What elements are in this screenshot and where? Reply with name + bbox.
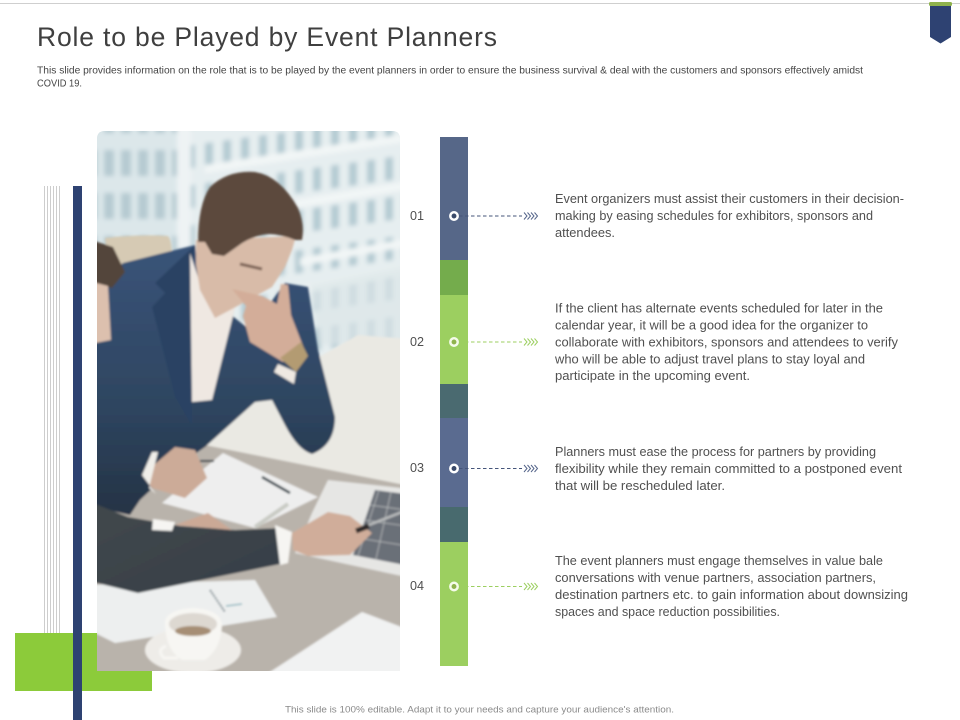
green accent block [15, 633, 152, 691]
front laptop [270, 611, 400, 671]
other man's head [97, 240, 126, 288]
middle hand [175, 513, 232, 530]
hair [198, 172, 303, 256]
left lapel [153, 246, 195, 346]
step 04: The event planners must engage themselves in value bale [555, 554, 883, 568]
top rule [0, 3, 960, 4]
step 02: If the client has alternate events scheduled for later in the [555, 302, 883, 316]
pointing hand [292, 512, 372, 556]
step 01: 01 [410, 209, 424, 223]
shirt cuffs [275, 525, 292, 565]
step 01: Event organizers must assist their customers in their decision- [555, 192, 904, 206]
step 02 [410, 302, 899, 383]
intro text [37, 66, 863, 90]
stylus [367, 510, 400, 528]
keyboard [352, 489, 400, 566]
saucer [144, 630, 242, 671]
step 04: conversations with venue partners, association partners, [555, 571, 876, 585]
intro text: COVID 19. [37, 78, 82, 90]
step 04 [410, 554, 908, 619]
photo: two businessmen at a desk [97, 131, 400, 671]
eyebrow and eye [240, 264, 262, 269]
step 03: 03 [410, 461, 424, 475]
step 02: participate in the upcoming event. [555, 369, 750, 383]
hand on chin [232, 284, 303, 362]
navy vertical bar [73, 186, 82, 720]
intro text: This slide provides information on the role that is to be played by the event planners in order to ensure the business survival & deal with the customers and sponsors effectively amidst [37, 66, 863, 76]
watch [280, 342, 308, 372]
neck and face [196, 236, 296, 318]
tabletop [97, 444, 400, 671]
jacket [85, 245, 335, 515]
step 02: calendar year, it will be a good idea for the organizer to [555, 318, 868, 332]
step 03: flexibility while they remain committed to a postponed event [555, 462, 903, 476]
back notebook [85, 580, 277, 643]
step 01: making by easing schedules for exhibitors, sponsors and [555, 209, 873, 223]
footer note: This slide is 100% editable. Adapt it to your needs and capture your audience's attention. [285, 704, 674, 716]
title: Role to be Played by Event Planners [37, 22, 497, 52]
pen on notebook [262, 477, 290, 493]
laptop [294, 479, 400, 577]
step 01: attendees. [555, 226, 615, 240]
bookmark icon [929, 2, 952, 44]
desk surface [206, 336, 400, 484]
shirt [190, 253, 235, 402]
writing hand [142, 447, 207, 498]
step 04: spaces and space reduction possibilities. [555, 605, 780, 619]
step 01 [410, 192, 904, 240]
step 04: 04 [410, 579, 424, 593]
step 03: that will be rescheduled later. [555, 479, 725, 493]
timeline bar [440, 137, 468, 666]
ruler edge [255, 504, 288, 527]
step 02: who will be able to adjust travel plans to stay loyal and [554, 352, 865, 366]
step 03: Planners must ease the process for partners by providing [555, 445, 876, 459]
step 03 [410, 445, 903, 493]
decorative vertical lines [44, 186, 60, 633]
step 02: 02 [410, 335, 424, 349]
front sleeve [97, 504, 281, 594]
step 04: destination partners etc. to gain information about downsizing [555, 588, 908, 602]
step 02: collaborate with exhibitors, sponsors and attendees to verify [555, 336, 899, 350]
notebook [162, 453, 318, 528]
chair [105, 235, 172, 268]
cup [160, 608, 222, 660]
